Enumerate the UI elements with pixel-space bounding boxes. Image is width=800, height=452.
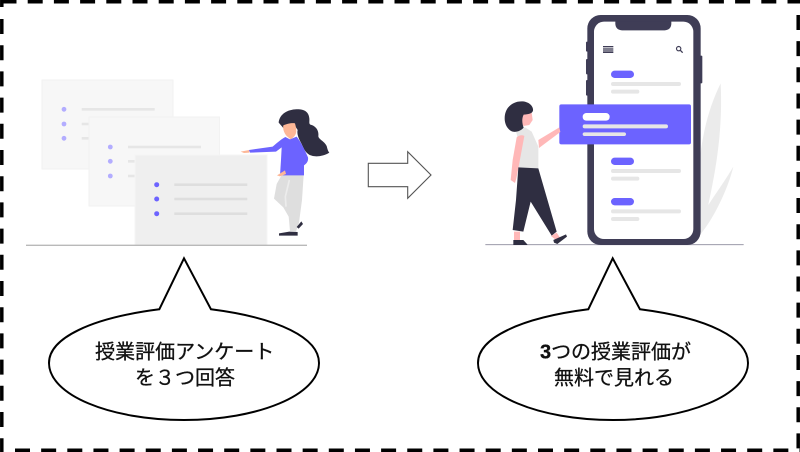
woman pointing at card bbox=[241, 109, 329, 236]
phone bbox=[586, 15, 702, 245]
speech bubble right bbox=[478, 258, 748, 420]
woman holding card bbox=[505, 101, 567, 245]
arrow bbox=[368, 152, 431, 198]
list item 3 bbox=[611, 198, 681, 221]
highlighted card bbox=[559, 104, 691, 144]
bubble text right: 3つの授業評価が bbox=[540, 340, 691, 364]
survey card 3 bbox=[135, 155, 267, 245]
search icon bbox=[676, 46, 683, 53]
ground line left bbox=[26, 245, 307, 246]
leaves bbox=[699, 83, 733, 236]
survey card 2 bbox=[89, 117, 220, 206]
speech bubble right: 無料で見れる bbox=[554, 366, 674, 390]
bubble text left: 授業評価アンケート bbox=[95, 340, 274, 364]
list item 1 bbox=[611, 71, 681, 94]
list item 2 bbox=[611, 158, 681, 181]
menu icon bbox=[603, 46, 613, 53]
survey card 1 bbox=[42, 80, 173, 169]
speech bubble left: を３つ回答 bbox=[135, 366, 235, 390]
ground line right bbox=[485, 244, 744, 245]
illustration: survey cards and woman bbox=[26, 80, 329, 246]
illustration: smartphone and woman bbox=[485, 15, 744, 245]
speech bubble left bbox=[49, 258, 319, 420]
